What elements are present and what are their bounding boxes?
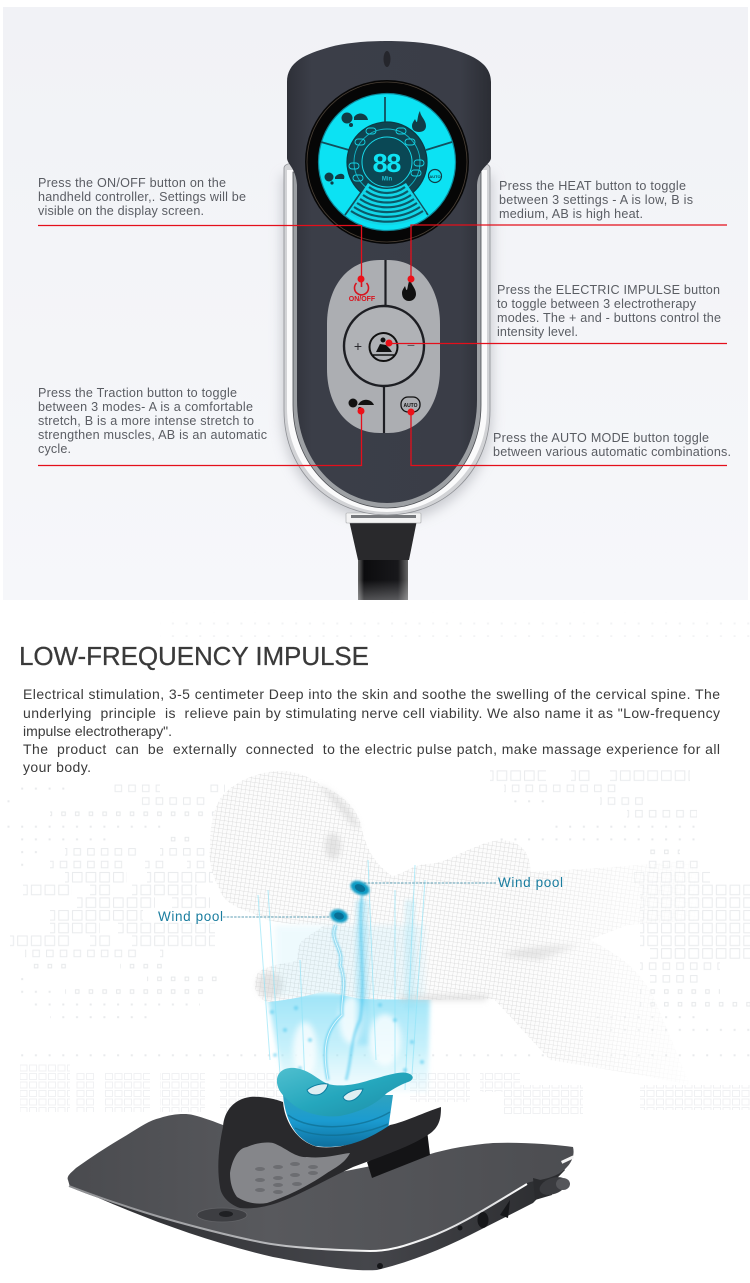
handheld controller xyxy=(282,41,492,600)
text: electric impulse instructions: modes. The + and - buttons control the xyxy=(497,311,721,325)
plate button xyxy=(197,1208,247,1222)
description paragraph: your body. xyxy=(23,759,91,775)
grey grip pad xyxy=(230,1142,350,1204)
text: heat instructions: medium, AB is high heat. xyxy=(499,207,643,221)
display auto icon xyxy=(428,170,442,182)
chrome edge xyxy=(69,1184,527,1251)
callout lines xyxy=(38,225,727,466)
text: traction instructions: between 3 modes- A is a comfortable xyxy=(38,400,253,414)
adjustment knob xyxy=(533,1156,574,1200)
display heat icon xyxy=(412,111,426,132)
label: upper wind pool: Wind pool xyxy=(498,875,563,890)
electric impulse icon xyxy=(370,333,398,361)
minus button: − xyxy=(407,337,415,353)
text: traction instructions: cycle. xyxy=(38,442,71,456)
level pills xyxy=(349,128,424,181)
display xyxy=(305,80,469,244)
auto button xyxy=(401,397,420,412)
text: electric impulse instructions xyxy=(497,283,721,339)
display segment dividers xyxy=(321,97,452,215)
text: on/off instructions: handheld controller,. Settings will be xyxy=(38,190,246,204)
auto button: AUTO xyxy=(403,403,418,409)
wireframe mannequin xyxy=(209,771,705,1085)
on/off button xyxy=(349,279,376,303)
plus button: + xyxy=(354,338,362,354)
text: traction instructions: stretch, B is a more intense stretch to xyxy=(38,414,254,428)
device underside xyxy=(70,1165,565,1270)
acupoint: lower wind pool xyxy=(158,907,349,925)
energy particles xyxy=(270,1003,424,1072)
description paragraph: underlying principle is relieve pain by stimulating nerve cell viability. We also name it as "Low-frequency xyxy=(23,705,720,721)
description paragraph: Electrical stimulation, 3-5 centimeter Deep into the skin and soothe the swelling of the cervical spine. The xyxy=(23,686,720,702)
pad electrodes xyxy=(307,1084,363,1101)
text: heat instructions xyxy=(499,179,693,221)
description paragraph: impulse electrotherapy". xyxy=(23,723,172,739)
label: lower wind pool: Wind pool xyxy=(158,909,223,924)
lightning xyxy=(325,895,362,1080)
description paragraph: The product can be externally connected to the electric pulse patch, make massage experience for all xyxy=(23,741,720,757)
neck rest shell xyxy=(218,1097,441,1208)
text: electric impulse instructions: to toggle between 3 electrotherapy xyxy=(497,297,697,311)
panel: controller guide background xyxy=(3,7,748,600)
electric impulse ring xyxy=(344,306,424,386)
beam white patches xyxy=(293,996,401,1078)
acupoint: upper wind pool xyxy=(348,875,563,898)
text: traction instructions xyxy=(38,386,267,456)
beam haze over mannequin xyxy=(275,925,425,997)
massage device xyxy=(68,1068,574,1270)
button panel xyxy=(327,260,440,433)
beam streaks xyxy=(258,860,425,1090)
text: auto mode instructions: Press the AUTO MODE button toggle xyxy=(493,431,709,445)
time readout: 88 xyxy=(372,151,402,181)
controller shadow xyxy=(282,175,492,522)
text: heat instructions: Press the HEAT button to toggle xyxy=(499,179,686,193)
neck rest support xyxy=(367,1130,430,1178)
mannequin shading xyxy=(257,784,580,1001)
display: Min xyxy=(382,176,392,182)
side ports xyxy=(377,1200,510,1269)
heading: LOW-FREQUENCY IMPULSE xyxy=(19,641,369,671)
indicator notch xyxy=(384,51,390,67)
text: on/off instructions xyxy=(38,176,246,218)
on/off button: ON/OFF xyxy=(349,296,376,303)
background tech pattern xyxy=(0,612,750,1115)
traction button xyxy=(348,398,374,411)
description paragraph xyxy=(23,686,720,775)
intensity arcs xyxy=(348,183,426,225)
text: electric impulse instructions: intensity level. xyxy=(497,325,578,339)
controller cable xyxy=(346,513,421,600)
electric beam glow xyxy=(267,994,430,1092)
chrome rim xyxy=(284,163,490,515)
text: traction instructions: Press the Traction button to toggle xyxy=(38,386,237,400)
text: electric impulse instructions: Press the ELECTRIC IMPULSE button xyxy=(497,283,720,297)
electric streaks xyxy=(258,860,425,1090)
text: auto mode instructions xyxy=(493,431,731,459)
text: traction instructions: strengthen muscles, AB is an automatic xyxy=(38,428,267,442)
text: on/off instructions: Press the ON/OFF button on the xyxy=(38,176,226,190)
display traction icons xyxy=(324,112,368,185)
callout dots xyxy=(358,276,414,416)
display auto icon: AUTO xyxy=(429,174,441,179)
blue bellows xyxy=(283,1095,393,1147)
teal neck pad xyxy=(277,1068,413,1116)
controller body xyxy=(287,41,491,503)
heat button xyxy=(402,279,416,301)
device top plate xyxy=(68,1114,574,1250)
text: on/off instructions: visible on the display screen. xyxy=(38,204,204,218)
text: auto mode instructions: between various automatic combinations. xyxy=(493,445,731,459)
grip bumps xyxy=(255,1162,318,1194)
text: heat instructions: between 3 settings - A is low, B is xyxy=(499,193,693,207)
central readout disc xyxy=(347,122,427,202)
